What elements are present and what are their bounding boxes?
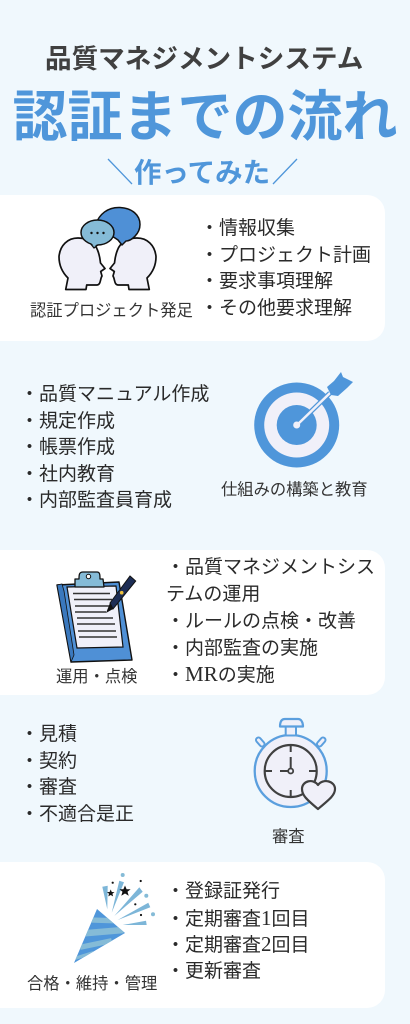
list: step 3: テムの運用 xyxy=(166,584,260,605)
list: step 2 xyxy=(20,384,209,511)
list: step 1: ・その他要求理解 xyxy=(200,298,352,318)
list: step 4: ・審査 xyxy=(20,777,77,798)
icon: party popper xyxy=(74,873,155,963)
list: step 5: ・登録証発行 xyxy=(166,881,280,902)
list: step 2: ・内部監査員育成 xyxy=(20,490,172,511)
list: step 5 xyxy=(166,881,310,982)
title: main heading: 認証までの流れ xyxy=(12,86,398,148)
panel: step 5 background xyxy=(0,862,385,1008)
list: step 4: ・見積 xyxy=(20,724,77,745)
icon: stopwatch with heart xyxy=(254,718,336,810)
panel: step 1 background xyxy=(0,195,385,341)
icon: target with arrow xyxy=(254,372,353,468)
caption: step 4: 審査 xyxy=(272,828,305,846)
panel: step 3 background xyxy=(0,550,385,695)
list: step 5: ・更新審査 xyxy=(166,960,261,982)
list: step 1: ・要求事項理解 xyxy=(200,271,333,292)
list: step 1 xyxy=(200,218,371,318)
list: step 3: ・品質マネジメントシス xyxy=(166,557,375,578)
list: step 3: ・MRの実施 xyxy=(166,662,275,686)
list: step 2: ・社内教育 xyxy=(20,464,115,484)
list: step 3: ・内部監査の実施 xyxy=(166,638,318,658)
subtitle with slashes: 作ってみた xyxy=(134,157,270,188)
list: step 4 xyxy=(20,724,134,824)
icon: two heads talking xyxy=(58,206,157,290)
list: step 3: ・ルールの点検・改善 xyxy=(166,611,356,632)
caption: step 5: 合格・維持・管理 xyxy=(27,975,157,993)
list: step 5: ・定期審査1回目 xyxy=(166,906,310,930)
caption: step 2: 仕組みの構築と教育 xyxy=(221,481,368,499)
list: step 2: ・帳票作成 xyxy=(20,437,115,458)
list: step 4: ・契約 xyxy=(20,750,77,772)
list: step 3 xyxy=(166,557,375,686)
list: step 2: ・品質マニュアル作成 xyxy=(20,384,209,405)
caption: step 1: 認証プロジェクト発足 xyxy=(30,302,193,320)
title: subject: 品質マネジメントシステム xyxy=(45,44,363,74)
list: step 1: ・情報収集 xyxy=(200,218,295,239)
list: step 5: ・定期審査2回目 xyxy=(166,932,310,956)
list: step 2: ・規定作成 xyxy=(20,410,115,432)
list: step 4: ・不適合是正 xyxy=(20,804,134,824)
list: step 1: ・プロジェクト計画 xyxy=(200,244,371,266)
caption: step 3: 運用・点検 xyxy=(56,668,137,686)
icon: clipboard with pen xyxy=(56,571,136,664)
